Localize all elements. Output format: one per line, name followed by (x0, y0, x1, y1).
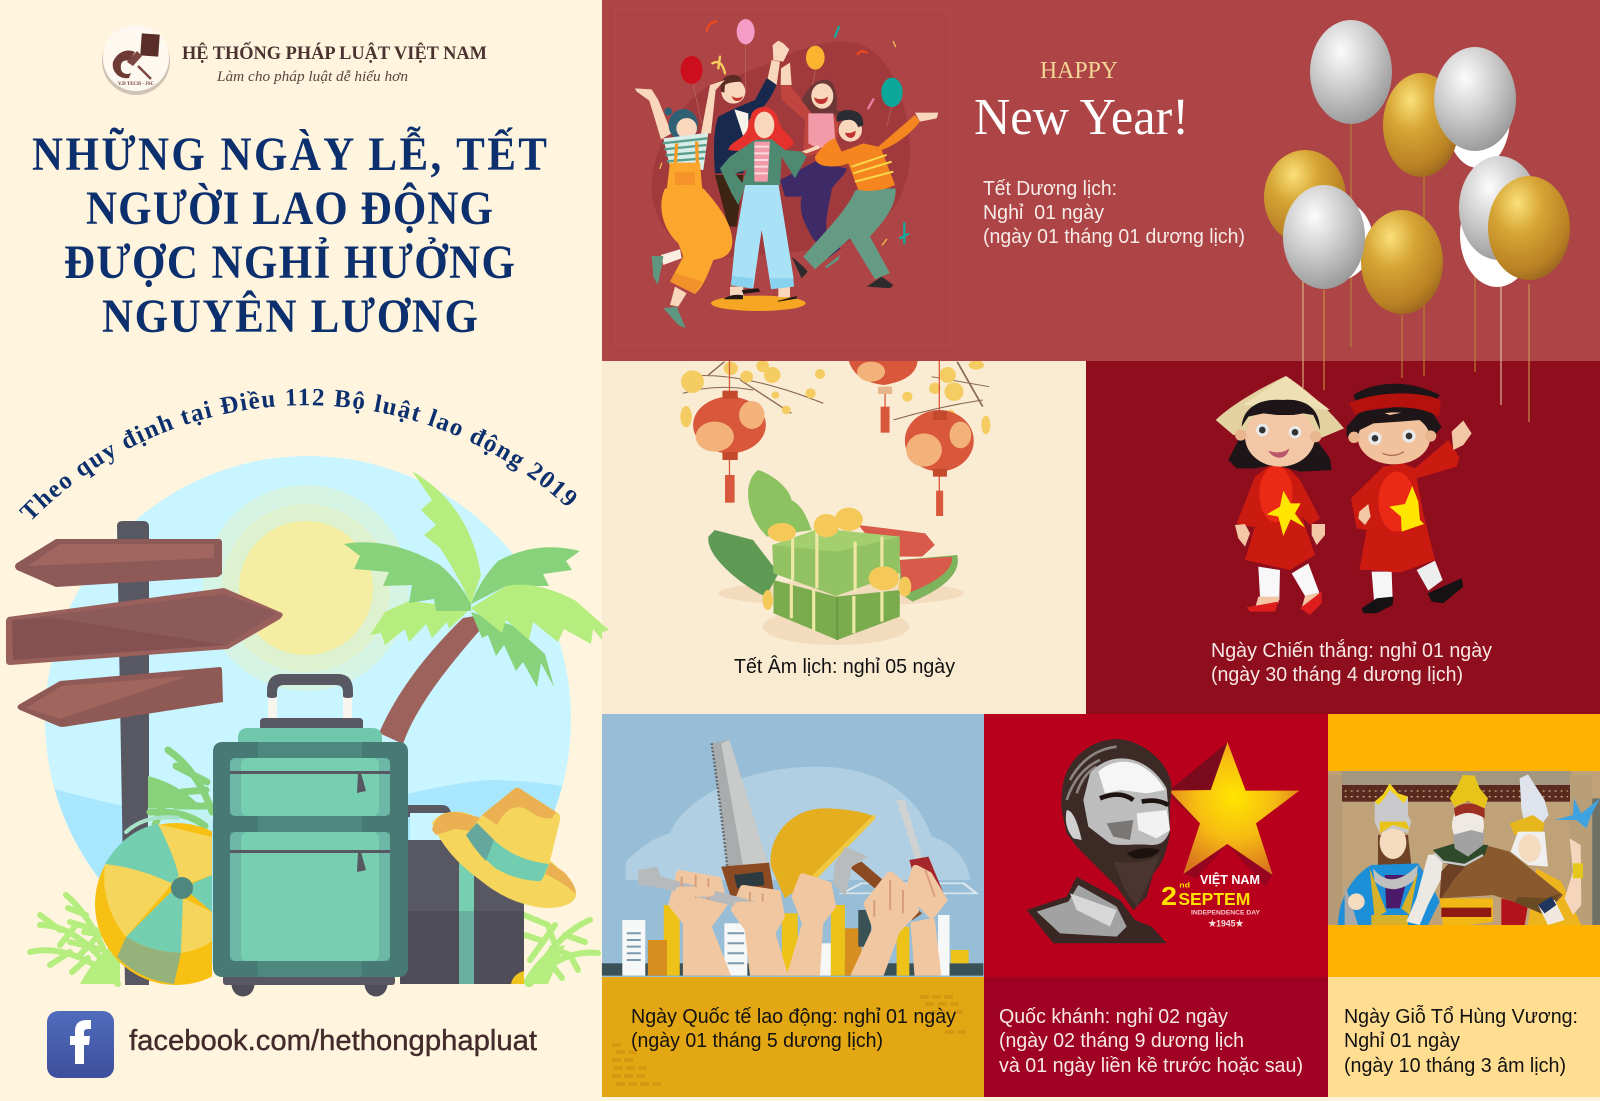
straw hat (432, 788, 576, 908)
city (602, 883, 983, 977)
dark suitcase (400, 805, 524, 984)
text: september 2: SEPTEM (1178, 889, 1250, 909)
illustration: hanging balloons (1264, 20, 1570, 422)
logo text: Làm cho pháp luật dễ hiểu hơn (216, 69, 408, 85)
panel: new year (602, 0, 1600, 361)
text: labour day (631, 1006, 956, 1052)
person: pink top (780, 63, 847, 268)
finger lines (682, 870, 935, 917)
hands (671, 867, 944, 975)
helmet (771, 808, 876, 898)
hammer (833, 847, 922, 920)
text: solar new year: Nghỉ 01 ngày (983, 202, 1104, 224)
heading: happy new year (974, 58, 1189, 146)
beach ball (95, 815, 212, 985)
text: victory day: (ngày 30 tháng 4 dương lịch) (1211, 664, 1463, 686)
bird (1555, 798, 1600, 828)
lanterns (693, 361, 974, 516)
logo text (182, 42, 487, 85)
blossoms (680, 360, 990, 434)
text: lunar new year: Tết Âm lịch: nghỉ 05 ngày (734, 655, 955, 678)
illustration: portrait and star (1027, 739, 1299, 943)
signpost (6, 521, 283, 985)
brick pattern (612, 995, 966, 1086)
confetti (660, 22, 908, 245)
text: hung kings day (1344, 1005, 1578, 1077)
title: NGƯỜI LAO ĐỘNG (86, 181, 493, 235)
fern: bottom right (522, 915, 598, 984)
illustration: travel scene (6, 450, 602, 996)
panel: national day (984, 714, 1328, 1097)
illustration: hung kings (1328, 771, 1600, 925)
text: september 2: 2 (1161, 881, 1177, 911)
person: navy jacket (714, 41, 789, 227)
boy (1347, 384, 1472, 613)
logo (102, 25, 170, 95)
illustration: lanterns and chung cake (680, 360, 990, 662)
green suitcase (213, 674, 408, 996)
portrait (1027, 739, 1172, 943)
flowers (763, 508, 911, 610)
panel: lunar new year (602, 360, 1086, 714)
shadows (718, 581, 964, 606)
person: red hair (711, 107, 820, 311)
text: hung kings day: Ngày Giỗ Tổ Hùng Vương: (1344, 1005, 1578, 1028)
panel: labour day (602, 714, 984, 1097)
text: victory day (1211, 639, 1492, 686)
wrench (638, 867, 756, 910)
watermelon (858, 525, 935, 557)
panel: victory day (1086, 361, 1600, 714)
text: solar new year: (ngày 01 tháng 01 dương lịch) (983, 226, 1245, 248)
text: labour day: Ngày Quốc tế lao động: nghỉ 01 ngày (631, 1006, 956, 1028)
fern: bottom left (30, 895, 120, 984)
logo text: HỆ THỐNG PHÁP LUẬT VIỆT NAM (182, 42, 487, 64)
text: national day: và 01 ngày liền kề trước hoặc sau) (999, 1055, 1303, 1077)
text: victory day: Ngày Chiến thắng: nghỉ 01 ngày (1211, 639, 1492, 662)
facebook url: facebook.com/hethongphapluat (129, 1025, 537, 1057)
text: labour day: (ngày 01 tháng 5 dương lịch) (631, 1030, 883, 1052)
saw (712, 740, 773, 897)
text: september 2: VIỆT NAM (1200, 872, 1260, 887)
text: september 2 (1161, 872, 1261, 929)
title: ĐƯỢC NGHỈ HƯỞNG (64, 235, 515, 289)
text: national day: (ngày 02 tháng 9 dương lịch (999, 1030, 1244, 1052)
logo: V.D TECH - JSC (118, 82, 154, 87)
girl (1216, 376, 1344, 615)
text: national day (999, 1006, 1303, 1077)
illustration: two children (1216, 376, 1472, 615)
text: september 2: INDEPENDENCE DAY (1191, 909, 1261, 916)
title (32, 126, 547, 343)
chung cakes (773, 580, 900, 640)
title: NGUYÊN LƯƠNG (102, 289, 478, 343)
text: september 2: ★1945★ (1207, 919, 1244, 929)
figure: left queen (1338, 783, 1440, 925)
text: solar new year (983, 178, 1245, 248)
person: orange sweater (792, 110, 938, 288)
text: hung kings day: (ngày 10 tháng 3 âm lịch) (1344, 1055, 1566, 1077)
person: overalls (635, 80, 732, 328)
icon: facebook (47, 1011, 114, 1078)
text: september 2: nd (1179, 880, 1190, 889)
screwdriver (897, 800, 946, 918)
panel: hung kings day (1328, 714, 1600, 1097)
icon: palm frond tip (602, 624, 609, 632)
text: hung kings day: Nghỉ 01 ngày (1344, 1030, 1460, 1052)
heading: happy new year: New Year! (974, 89, 1189, 146)
text: national day: Quốc khánh: nghỉ 02 ngày (999, 1006, 1228, 1028)
leaves (748, 470, 812, 537)
palm tree (344, 471, 602, 744)
curved subtitle: Theo quy định tại Điều 112 Bộ luật lao động 2019 (18, 388, 576, 520)
panel: left intro (0, 0, 602, 1101)
heading: happy new year: HAPPY (1040, 58, 1118, 84)
illustration: dancing people (635, 19, 938, 328)
illustration: tools and hands (602, 740, 983, 977)
fingers over tools (675, 886, 764, 914)
figure: central king (1406, 775, 1565, 925)
sky circle (40, 450, 580, 990)
text: solar new year: Tết Dương lịch: (983, 178, 1117, 200)
fern: behind ball (148, 750, 212, 830)
figure: right princess (1501, 774, 1583, 925)
title: NHỮNG NGÀY LỄ, TẾT (32, 126, 547, 181)
balloons (681, 19, 903, 127)
